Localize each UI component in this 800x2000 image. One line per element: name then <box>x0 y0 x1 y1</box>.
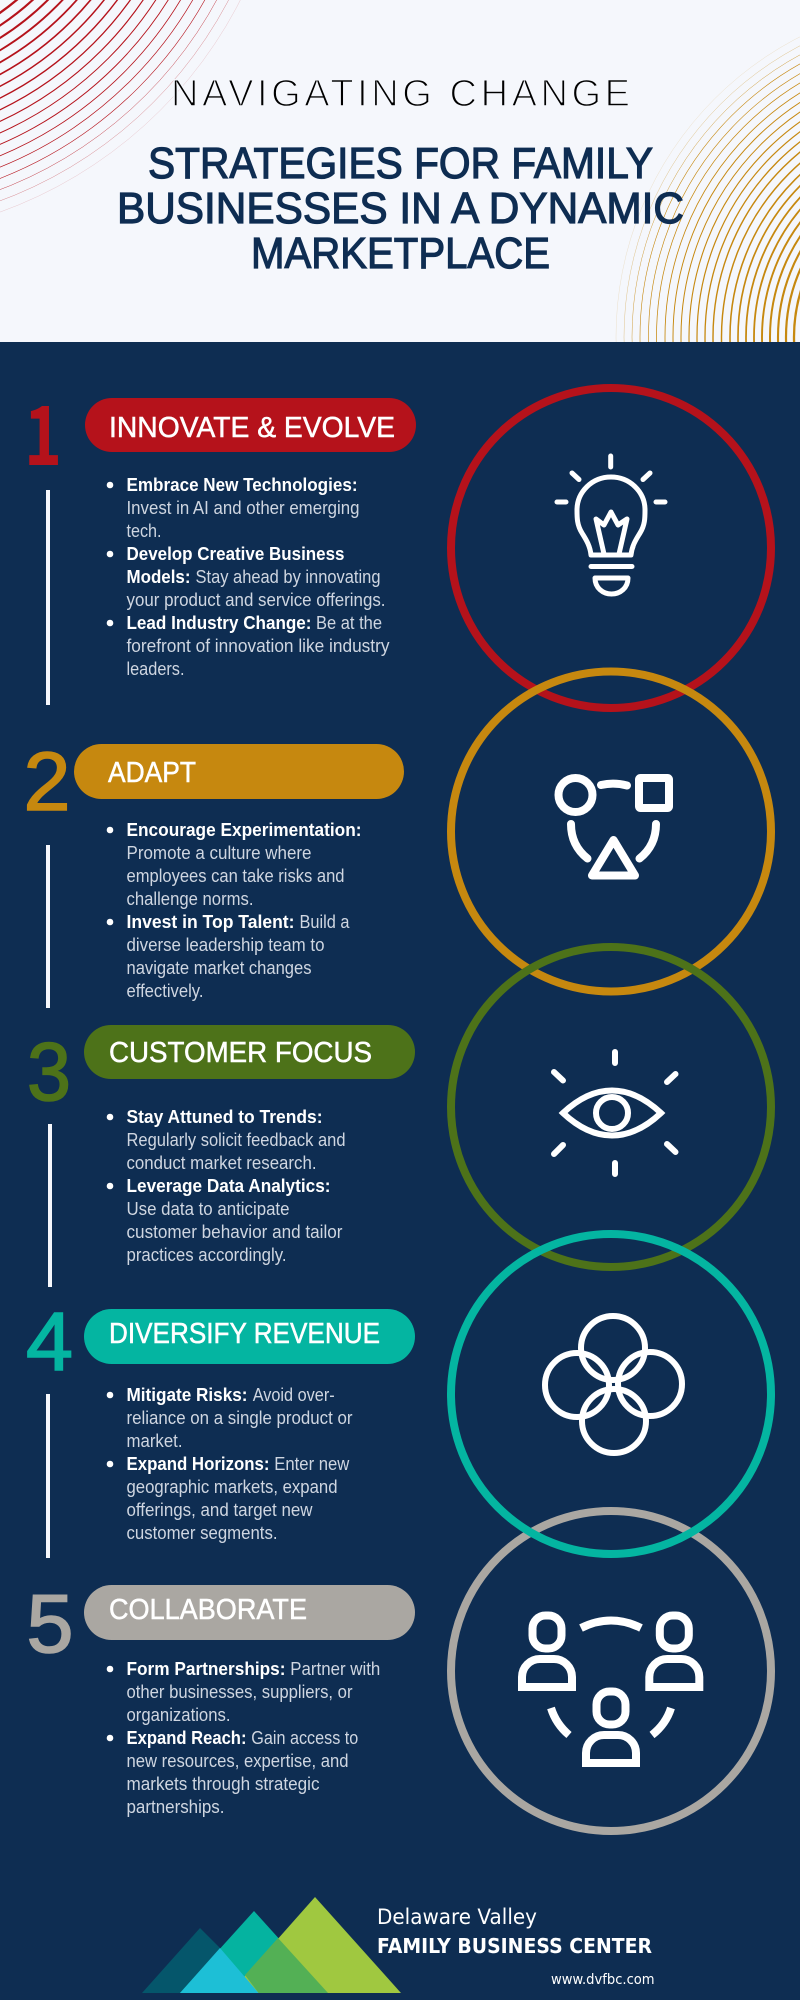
bullet list <box>107 820 362 1001</box>
icon ring 3: green circle with eye <box>451 947 771 1267</box>
bullet list: new resources, expertise, and <box>126 1751 348 1771</box>
bullet list: Promote a culture where <box>126 843 312 863</box>
subtitle: Strategies for family businesses: BUSINESSES IN A DYNAMIC <box>117 184 684 233</box>
bullet list: Stay ahead by innovating <box>196 567 380 587</box>
bullet list: partnerships. <box>126 1797 224 1817</box>
pill heading <box>74 744 404 799</box>
footer organization name <box>377 1905 652 1958</box>
footer organization name: Delaware Valley <box>377 1905 537 1929</box>
pill heading: ADAPT <box>108 757 196 789</box>
pill heading <box>85 398 416 452</box>
bullet list <box>107 1385 352 1543</box>
number 3: 3 <box>27 1025 71 1118</box>
bullet list: leaders. <box>126 659 184 679</box>
bullet list: Encourage Experimentation: <box>126 820 362 840</box>
bullet list: navigate market changes <box>126 958 312 978</box>
section 5: collaborate <box>26 1577 415 1817</box>
icon: three people network <box>522 1616 699 1763</box>
decorative gold concentric arcs <box>616 36 800 342</box>
bullet list <box>107 1107 346 1265</box>
bullet list: Avoid over- <box>253 1385 335 1405</box>
pill heading: DIVERSIFY REVENUE <box>109 1318 380 1350</box>
section 2: adapt <box>24 735 404 1008</box>
panel: header background <box>0 0 800 342</box>
footer organization name: FAMILY BUSINESS CENTER <box>377 1934 652 1958</box>
bullet list: Leverage Data Analytics: <box>126 1176 330 1196</box>
bullet list: diverse leadership team to <box>126 935 324 955</box>
bullet list: Partner with <box>290 1659 380 1679</box>
divider line <box>46 490 50 705</box>
divider line <box>48 1124 52 1287</box>
icon: circle, square and triangle <box>558 778 669 876</box>
bullet list: your product and service offerings. <box>126 590 386 610</box>
bullet list: Lead Industry Change: <box>126 613 312 633</box>
bullet list: Mitigate Risks: <box>126 1385 248 1405</box>
bullet list: Models: <box>126 567 190 587</box>
bullet list: customer segments. <box>126 1523 278 1543</box>
bullet list <box>107 1659 380 1817</box>
footer logo: overlapping mountains <box>142 1897 401 1993</box>
icon ring 1: red circle with light bulb <box>451 388 771 708</box>
section 3: customer focus <box>27 1025 415 1287</box>
bullet list: Form Partnerships: <box>126 1659 286 1679</box>
number 1: 1 <box>24 370 62 489</box>
bullet list: Gain access to <box>251 1728 358 1748</box>
decorative red concentric arcs <box>0 0 240 212</box>
icon ring 4: teal circle with overlapping rings <box>451 1234 771 1554</box>
bullet list: effectively. <box>126 981 204 1001</box>
divider line <box>46 845 50 1008</box>
title: Navigating Change: NAVIGATING CHANGE <box>171 73 630 115</box>
bullet list: organizations. <box>126 1705 230 1725</box>
pill heading <box>84 1309 415 1364</box>
bullet list: tech. <box>126 521 162 541</box>
pill heading: COLLABORATE <box>109 1594 307 1626</box>
section 4: diversify revenue <box>26 1295 415 1558</box>
pill heading: INNOVATE & EVOLVE <box>109 412 395 444</box>
icon: light bulb <box>557 456 665 594</box>
pill heading <box>84 1025 415 1079</box>
number 2: 2 <box>24 735 70 828</box>
footer website url: www.dvfbc.com <box>551 1972 655 1988</box>
bullet list: reliance on a single product or <box>126 1408 352 1428</box>
bullet list: Be at the <box>316 613 382 633</box>
bullet list: Enter new <box>274 1454 350 1474</box>
bullet list: Stay Attuned to Trends: <box>126 1107 322 1127</box>
bullet list: customer behavior and tailor <box>126 1222 342 1242</box>
bullet list: Expand Horizons: <box>126 1454 270 1474</box>
bullet list: Expand Reach: <box>126 1728 246 1748</box>
subtitle: Strategies for family businesses <box>117 139 684 278</box>
bullet list: Build a <box>300 912 350 932</box>
bullet list: conduct market research. <box>126 1153 316 1173</box>
icon: eye <box>554 1052 676 1174</box>
subtitle: Strategies for family businesses: STRATEGIES FOR FAMILY <box>148 139 653 188</box>
subtitle: Strategies for family businesses: MARKETPLACE <box>251 229 550 278</box>
bullet list: offerings, and target new <box>126 1500 313 1520</box>
bullet list: forefront of innovation like industry <box>126 636 390 656</box>
bullet list: other businesses, suppliers, or <box>126 1682 353 1702</box>
icon ring 5: grey circle with people <box>451 1511 771 1831</box>
divider line <box>46 1394 50 1558</box>
icon: four interlocking rings <box>545 1316 682 1453</box>
pill heading: CUSTOMER FOCUS <box>109 1037 372 1069</box>
bullet list: Use data to anticipate <box>126 1199 290 1219</box>
icon ring 2: gold circle with shapes <box>451 672 771 992</box>
bullet list: Develop Creative Business <box>126 544 344 564</box>
bullet list: market. <box>126 1431 182 1451</box>
bullet list: employees can take risks and <box>126 866 344 886</box>
section 1: innovate and evolve <box>24 370 416 705</box>
number 4: 4 <box>26 1295 73 1388</box>
bullet list: practices accordingly. <box>126 1245 286 1265</box>
bullet list <box>107 475 389 679</box>
bullet list: markets through strategic <box>126 1774 320 1794</box>
pill heading <box>84 1585 415 1640</box>
number 5: 5 <box>26 1577 74 1670</box>
bullet list: Invest in AI and other emerging <box>126 498 360 518</box>
bullet list: Regularly solicit feedback and <box>126 1130 346 1150</box>
bullet list: Invest in Top Talent: <box>126 912 294 932</box>
bullet list: challenge norms. <box>126 889 254 909</box>
bullet list: Embrace New Technologies: <box>126 475 358 495</box>
bullet list: geographic markets, expand <box>126 1477 338 1497</box>
